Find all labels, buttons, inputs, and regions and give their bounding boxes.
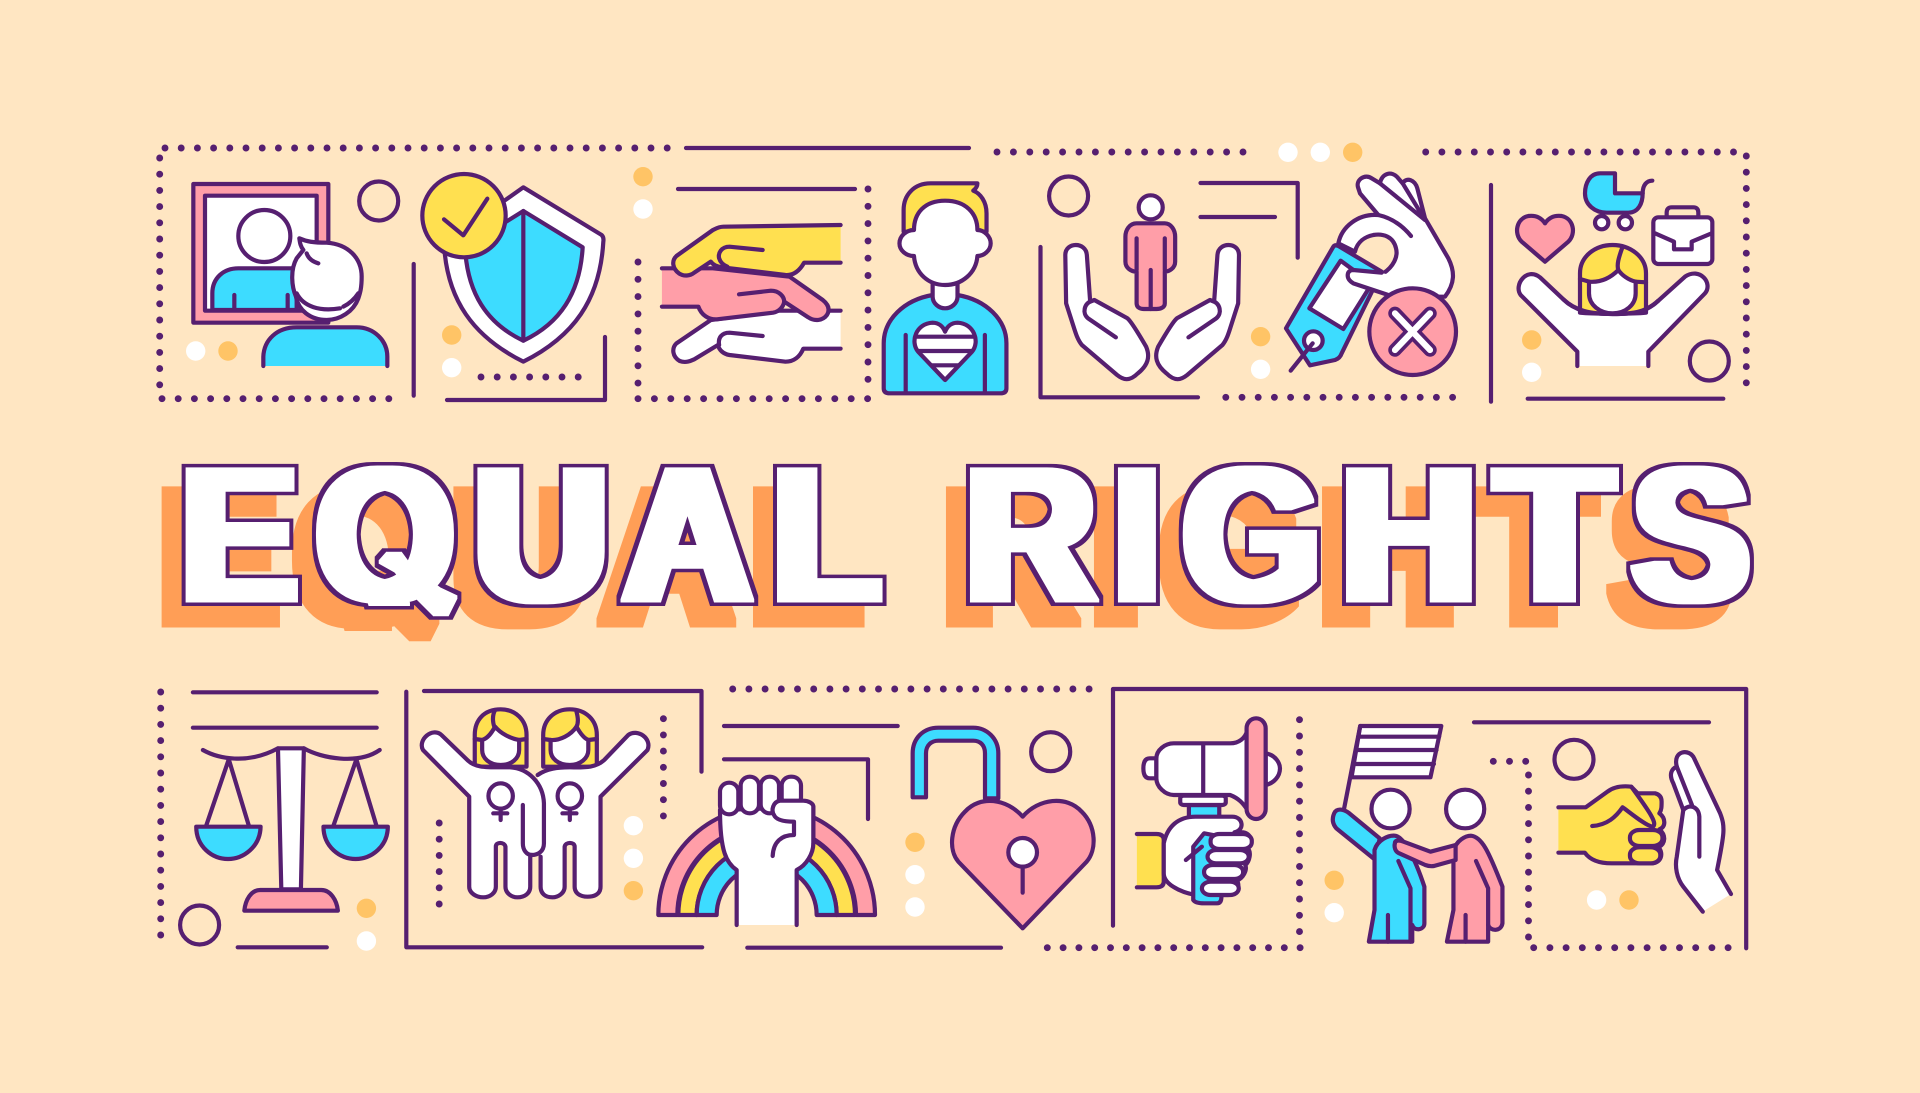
title: EQUAL RIGHTS: U [474,429,609,643]
icon: two women with raised arms [422,709,648,897]
title: EQUAL RIGHTS: I [1115,428,1159,642]
title: EQUAL RIGHTS: A [602,450,730,665]
title: EQUAL RIGHTS: G [1183,428,1320,643]
icon: hand holding price tag with cross [1286,174,1456,375]
icon: heart padlock [913,728,1094,928]
icon: hand holding megaphone [1137,718,1280,903]
title: EQUAL RIGHTS: I [1094,450,1138,664]
dotted and line frames [160,148,1746,948]
icon: woman with stroller, heart and briefcase [1517,173,1712,366]
icon: open hands protecting person [1065,195,1239,379]
icon: stacked hands [662,225,841,362]
title: EQUAL RIGHTS: S [1612,449,1728,664]
title: EQUAL RIGHTS: U [453,451,588,665]
icon: two people with flag [1333,726,1502,942]
icon: raised fist over rainbow [658,777,875,925]
title: EQUAL RIGHTS: A [624,428,751,643]
title: EQUAL RIGHTS: G [1162,450,1299,665]
title: EQUAL RIGHTS [162,462,1754,642]
title: EQUAL RIGHTS: H [1320,450,1456,664]
title: EQUAL RIGHTS: R [965,428,1096,642]
title: EQUAL RIGHTS: Q [295,450,433,665]
title: EQUAL RIGHTS: L [752,450,859,665]
icon: person looking in mirror [193,184,387,366]
title: EQUAL RIGHTS: E [182,427,297,642]
title: EQUAL RIGHTS: S [1633,427,1749,642]
title: EQUAL RIGHTS: R [944,450,1075,664]
title: EQUAL RIGHTS: H [1341,428,1477,642]
icon: fist against raised open hand [1558,752,1731,912]
accent dots [186,143,1639,951]
title: EQUAL RIGHTS: L [773,428,880,643]
title: EQUAL RIGHTS: Q [316,428,454,643]
icon: shield with check badge [422,174,603,362]
title: EQUAL RIGHTS: T [1475,450,1593,664]
icon: scales of justice [196,748,388,911]
title: EQUAL RIGHTS: E [160,449,276,664]
icon: man with striped heart [884,183,1006,393]
title: EQUAL RIGHTS: T [1496,428,1614,642]
